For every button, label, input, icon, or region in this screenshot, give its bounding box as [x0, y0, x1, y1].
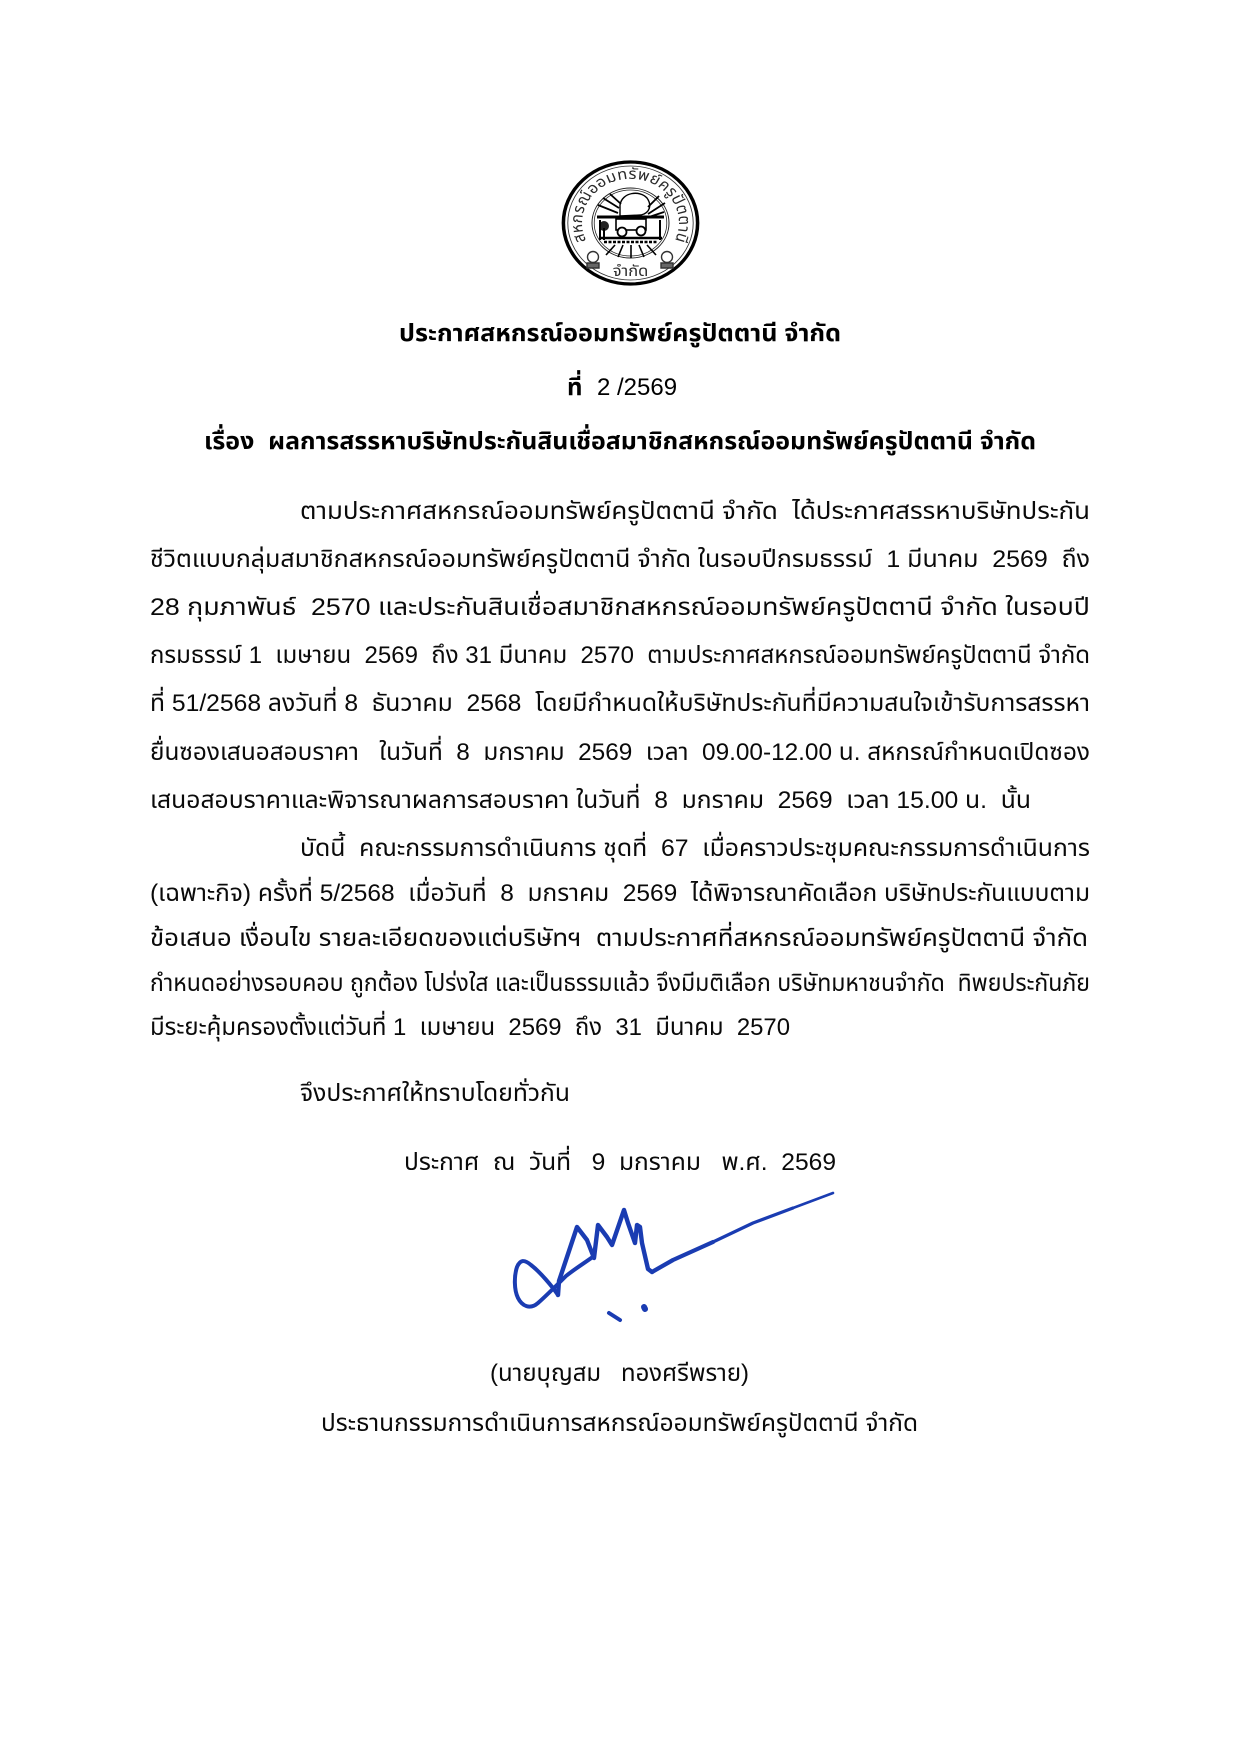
paragraph: background of the selection — [150, 498, 1090, 814]
paragraph: background of the selection: เสนอสอบราคาและพิจารณาผลการสอบราคา ในวันที่ 8 มกราคม 2569 เวลา 15.00 น. นั้น — [150, 783, 1031, 814]
announcement number: 2 /2569 — [597, 374, 677, 401]
signature — [515, 1193, 833, 1320]
paragraph: selection result: มีระยะคุ้มครองตั้งแต่วันที่ 1 เมษายน 2569 ถึง 31 มีนาคม 2570 — [150, 1010, 790, 1042]
signatory position: ประธานกรรมการดำเนินการสหกรณ์ออมทรัพย์ครูปัตตานี จำกัด — [321, 1410, 918, 1438]
closing statement: จึงประกาศให้ทราบโดยทั่วกัน — [300, 1077, 570, 1107]
paragraph: selection result: (เฉพาะกิจ) ครั้งที่ 5/2568 เมื่อวันที่ 8 มกราคม 2569 ได้พิจารณาคัดเลือก บริษัทประกันแบบตาม — [150, 876, 1090, 907]
icon: cooperative seal: จำกัด — [613, 264, 648, 280]
emblem picture inside the seal — [597, 193, 665, 258]
paragraph: background of the selection: กรมธรรม์ 1 เมษายน 2569 ถึง 31 มีนาคม 2570 ตามประกาศสหกรณ์ออมทรัพย์ครูปัตตานี จำกัด — [150, 642, 1090, 670]
small emblems flanking the seal — [587, 252, 673, 268]
announcement number — [567, 370, 677, 401]
paragraph: background of the selection: ยื่นซองเสนอสอบราคา ในวันที่ 8 มกราคม 2569 เวลา 09.00-12.00 น. สหกรณ์กำหนดเปิดซอง — [150, 735, 1090, 766]
paragraph: selection result — [150, 831, 1090, 1042]
paragraph: selection result: ข้อเสนอ เงื่อนไข รายละเอียดของแต่บริษัทฯ ตามประกาศที่สหกรณ์ออมทรัพย์ครูปัตตานี จำกัด — [150, 921, 1088, 953]
signatory name: (นายบุญสม ทองศรีพราย) — [490, 1360, 749, 1388]
icon: cooperative seal: สหกรณ์ออมทรัพย์ครูปัตตานี — [573, 167, 688, 244]
title: ประกาศสหกรณ์ออมทรัพย์ครูปัตตานี จำกัด — [399, 320, 841, 348]
paragraph: background of the selection: ที่ 51/2568 ลงวันที่ 8 ธันวาคม 2568 โดยมีกำหนดให้บริษัทประกันที่มีความสนใจเข้ารับการสรรหา — [150, 686, 1090, 717]
icon: cooperative seal — [562, 160, 700, 286]
announcement number: ที่ — [567, 374, 582, 401]
paragraph: background of the selection: ชีวิตแบบกลุ่มสมาชิกสหกรณ์ออมทรัพย์ครูปัตตานี จำกัด ในรอบปีกรมธรรม์ 1 มีนาคม 2569 ถึง — [150, 545, 1090, 574]
paragraph: background of the selection: 28 กุมภาพันธ์ 2570 และประกันสินเชื่อสมาชิกสหกรณ์ออมทรัพย์ครูปัตตานี จำกัด ในรอบปี — [150, 590, 1090, 622]
subject heading: เรื่อง ผลการสรรหาบริษัทประกันสินเชื่อสมาชิกสหกรณ์ออมทรัพย์ครูปัตตานี จำกัด — [204, 424, 1036, 456]
paragraph: selection result: กำหนดอย่างรอบคอบ ถูกต้อง โปร่งใส และเป็นธรรมแล้ว จึงมีมติเลือก บริษัทมหาชนจำกัด ทิพยประกันภัย — [150, 969, 1090, 998]
paragraph: background of the selection: ตามประกาศสหกรณ์ออมทรัพย์ครูปัตตานี จำกัด ได้ประกาศสรรหาบริษัทประกัน — [300, 498, 1090, 526]
paragraph: selection result: บัดนี้ คณะกรรมการดำเนินการ ชุดที่ 67 เมื่อคราวประชุมคณะกรรมการดำเนินการ — [300, 831, 1090, 863]
date of announcement: ประกาศ ณ วันที่ 9 มกราคม พ.ศ. 2569 — [404, 1145, 836, 1176]
